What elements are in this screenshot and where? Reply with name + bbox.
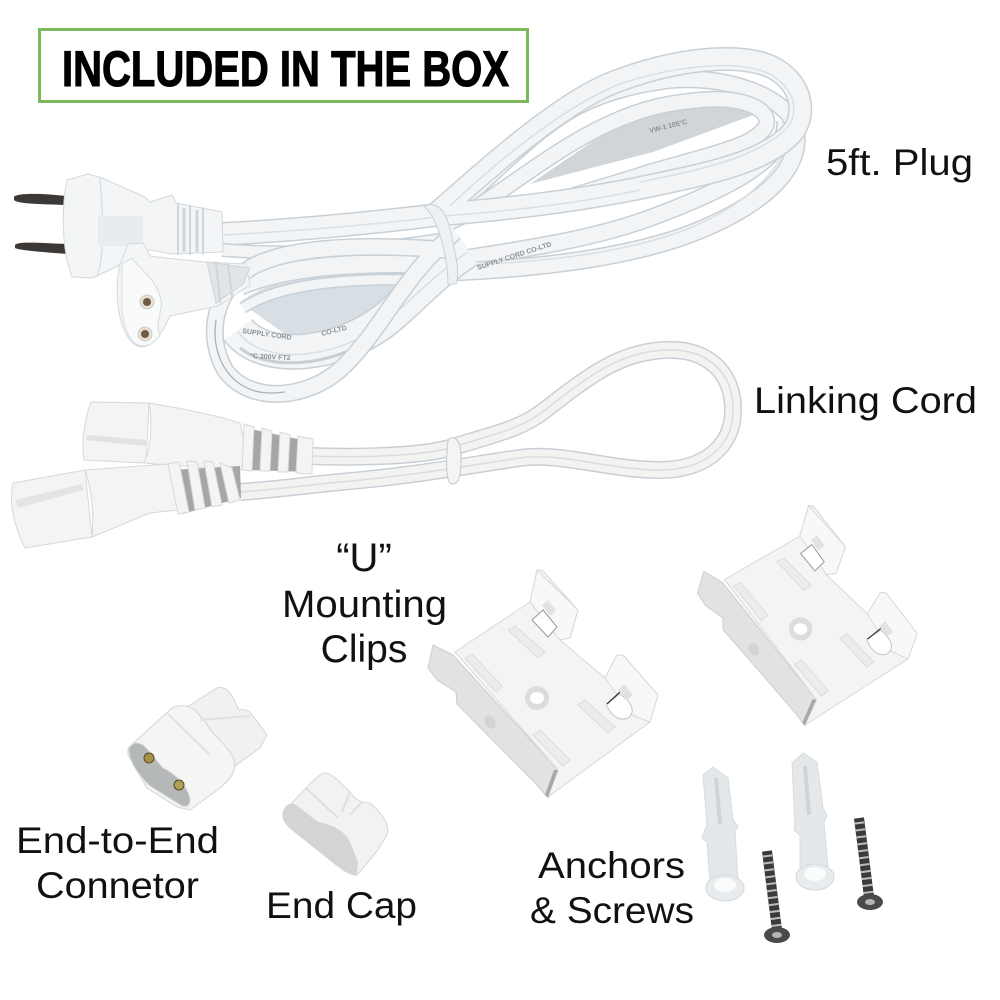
label: End-to-End Connetor: Connetor [36,865,199,906]
icon: U mounting clip right [689,499,925,733]
label: Linking Cord: Linking Cord [754,380,977,421]
cord printing [242,118,688,362]
plug body [63,174,223,278]
label: Anchors & Screws: & Screws [530,890,694,931]
angled connector [117,243,250,347]
cord tie [447,438,461,484]
label: End-to-End Connetor [16,820,219,906]
label: U Mounting Clips: Clips [321,628,407,671]
label: 5ft. Plug: 5ft. Plug [826,142,973,183]
label: End Cap: End Cap [266,885,417,926]
icon: anchor 2 [792,753,834,890]
icon: screw 1 [764,851,790,943]
icon: end cap [283,773,388,875]
cord tie [424,205,458,284]
label: Anchors & Screws: Anchors [538,845,685,886]
title: INCLUDED IN THE BOX [62,41,509,97]
label: Anchors & Screws [530,845,694,931]
icon: anchor 1 [702,767,744,901]
upper connector [83,402,313,474]
icon: linking cord [11,350,733,548]
label: U Mounting Clips: Mounting [282,584,447,626]
icon: 5ft plug power cord [14,59,800,394]
cord printing: SUPPLY CORD CO-LTD [476,241,552,272]
cord printing: SUPPLY CORD [242,328,292,342]
plug prongs [14,194,68,254]
title box [40,30,528,102]
icon: end-to-end connector [128,687,267,810]
lower connector [11,461,241,548]
icon: screw 2 [857,818,883,910]
icon: U mounting clip left [428,570,658,798]
label: End-to-End Connetor: End-to-End [16,820,219,861]
cord printing: CO-LTD [321,325,348,338]
label: U Mounting Clips [282,536,447,671]
cord printing: °C 300V FT2 [250,352,291,362]
label: U Mounting Clips: “U” [336,536,392,580]
cord printing: VW-1 105°C [649,118,688,135]
